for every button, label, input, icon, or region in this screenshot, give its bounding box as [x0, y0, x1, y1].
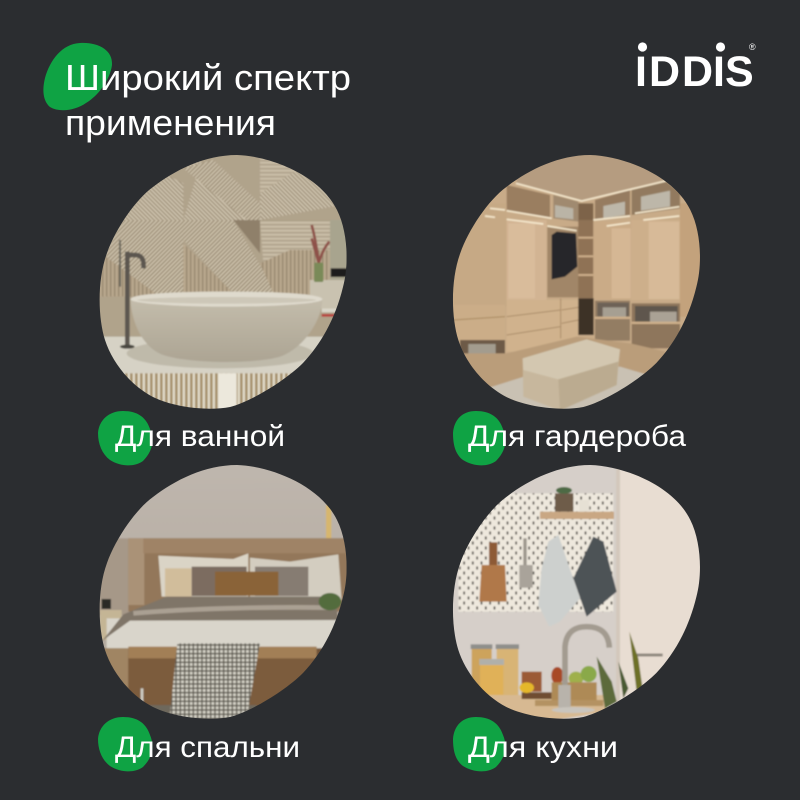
LED strips — [485, 181, 679, 231]
greenery — [319, 593, 341, 610]
panel: kitchen — [452, 465, 700, 772]
tub — [130, 300, 321, 362]
green blob behind heading — [43, 43, 112, 110]
logo: iDDiS: IDDIS — [635, 48, 754, 96]
label: bathroom — [98, 411, 285, 465]
vase with twigs — [314, 263, 323, 282]
photo: walk-in wardrobe with ottoman — [452, 155, 700, 409]
label text: Для ванной — [115, 420, 285, 453]
photo: bedroom with upholstered bed — [100, 465, 347, 719]
logo: iDDiS: ® — [749, 42, 756, 52]
heading block: применения — [65, 102, 276, 143]
heading block — [43, 43, 351, 143]
floor and rug — [464, 336, 666, 386]
label text: Для спальни — [115, 731, 300, 764]
label: kitchen — [453, 717, 618, 771]
label text: Для кухни — [468, 731, 618, 764]
plant — [597, 657, 617, 708]
door handle — [636, 652, 664, 658]
green blob — [453, 717, 505, 771]
pillows — [158, 553, 248, 597]
duvet and runner — [107, 618, 340, 650]
counter items — [483, 695, 607, 721]
pegboard — [458, 493, 613, 612]
green blob — [453, 411, 505, 465]
faucet — [125, 252, 144, 347]
label: bedroom — [98, 717, 300, 771]
photo: kitchen with pegboard and faucet — [452, 465, 700, 719]
faucet — [565, 627, 609, 688]
panel: bathroom — [98, 155, 347, 466]
photo: bathroom with freestanding tub — [100, 155, 347, 409]
panel: bedroom — [98, 465, 347, 772]
panel: wardrobe — [452, 155, 700, 466]
label text: Для гардероба — [468, 420, 686, 453]
title: Широкий спектр — [65, 57, 351, 98]
throw — [169, 643, 260, 720]
ottoman — [522, 361, 619, 408]
green blob — [98, 411, 152, 465]
label: wardrobe — [453, 411, 686, 465]
bench — [108, 648, 322, 657]
drawers — [453, 305, 505, 342]
green blob — [98, 717, 152, 771]
